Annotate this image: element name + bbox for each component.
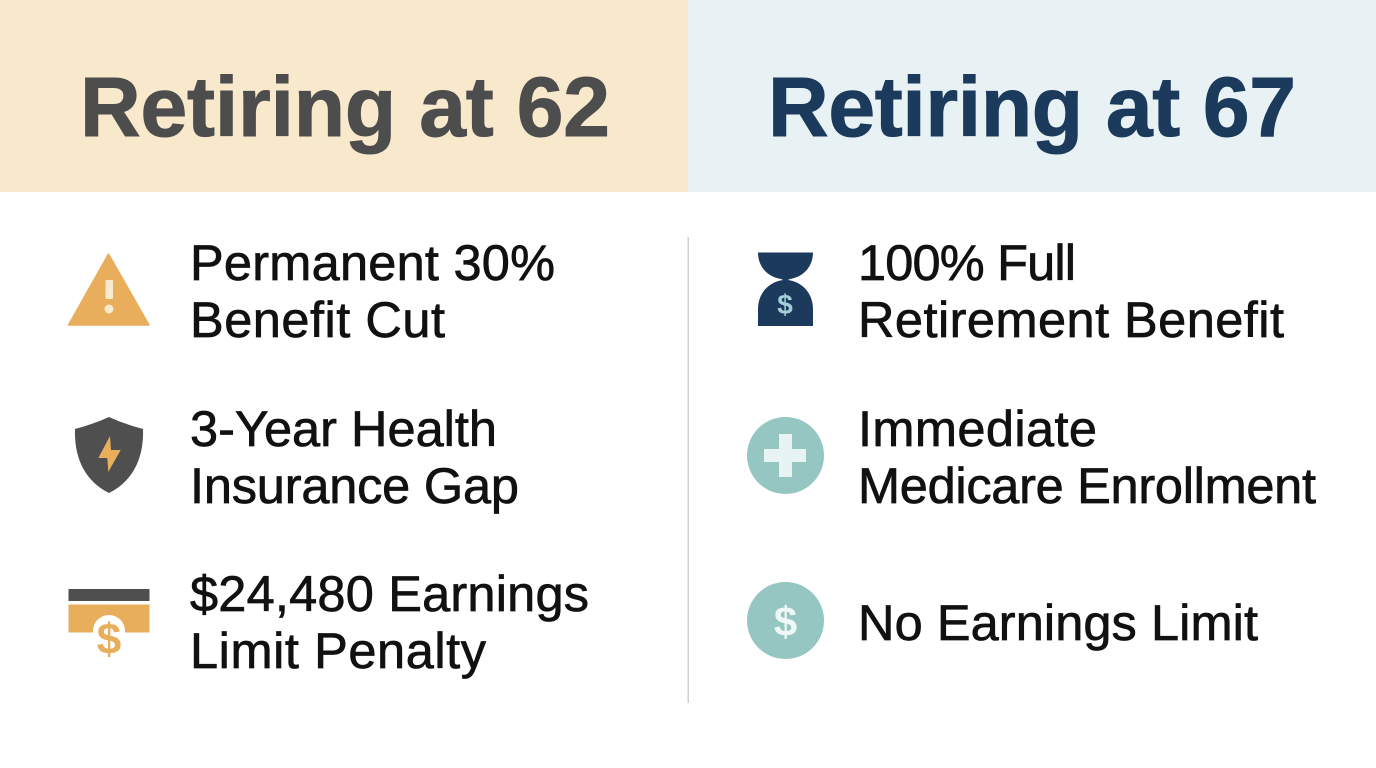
- panel: left header: [0, 0, 688, 192]
- text: 100% full retirement benefit: [858, 234, 1284, 348]
- text: earnings limit penalty: [190, 565, 589, 679]
- text: 3-year health insurance gap: 3-Year Health: [190, 400, 497, 457]
- text: 100% full retirement benefit: Retirement Benefit: [858, 291, 1284, 348]
- icon: shield with bolt: [75, 417, 143, 493]
- icon: medical cross: [747, 417, 824, 494]
- icon: hourglass money bag: [758, 252, 813, 326]
- text: 3-year health insurance gap: Insurance Gap: [190, 457, 519, 514]
- text: immediate medicare enrollment: Medicare Enrollment: [858, 457, 1316, 514]
- text: no earnings limit: No Earnings Limit: [858, 594, 1258, 651]
- text: permanent 30% benefit cut: Benefit Cut: [190, 291, 445, 348]
- icon: card with dollar: [68, 589, 150, 664]
- text: permanent 30% benefit cut: [190, 234, 555, 348]
- icon: hourglass money bag: $: [777, 289, 793, 320]
- icon: card with dollar: $: [97, 615, 121, 664]
- icon: dollar circle: $: [774, 598, 797, 645]
- text: 3-year health insurance gap: [190, 400, 519, 514]
- text: immediate medicare enrollment: Immediate: [858, 400, 1097, 457]
- text: permanent 30% benefit cut: Permanent 30%: [190, 234, 555, 291]
- heading: retiring at 67: Retiring at 67: [768, 60, 1296, 154]
- heading: retiring at 62: Retiring at 62: [80, 60, 610, 154]
- text: 100% full retirement benefit: 100% Full: [858, 234, 1076, 291]
- icon: dollar circle: [747, 582, 824, 659]
- text: earnings limit penalty: Limit Penalty: [190, 622, 487, 679]
- panel: right header: [688, 0, 1376, 192]
- text: immediate medicare enrollment: [858, 400, 1316, 514]
- text: earnings limit penalty: $24,480 Earnings: [190, 565, 589, 622]
- icon: warning triangle: [68, 254, 149, 325]
